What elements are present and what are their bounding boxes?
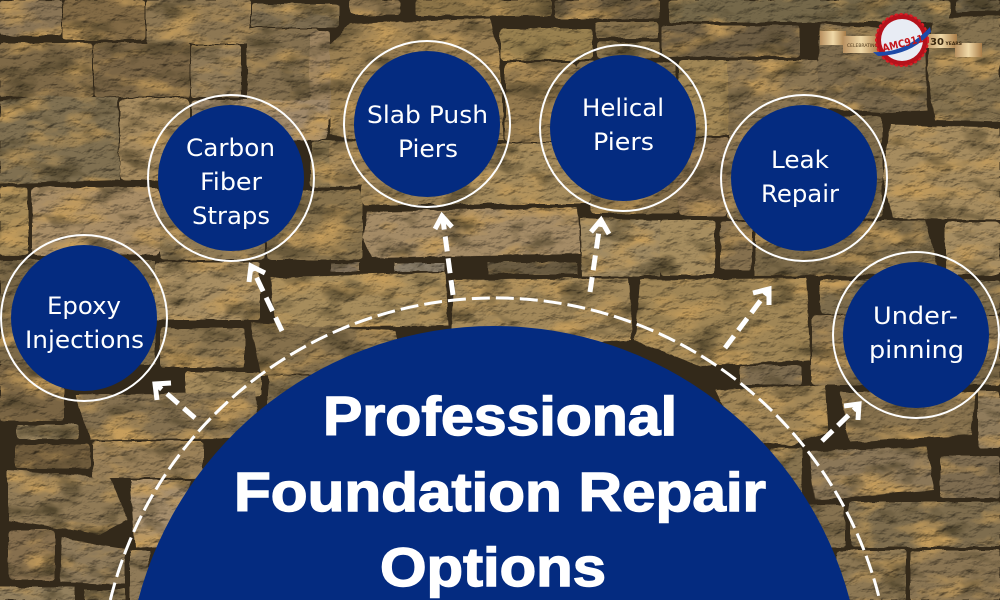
title: Professional [323,385,677,447]
node: Under-pinning: pinning [869,336,964,364]
node: Helical Piers: Piers [593,128,654,156]
dashed arc around main heading [110,298,880,600]
node: Slab Push Piers [344,41,510,207]
node: Epoxy Injections: Epoxy [47,292,121,320]
arrow to Slab Push Piers [435,216,453,295]
node: Slab Push Piers: Slab Push [367,101,488,129]
logo: AMC911 30 years badge [820,14,982,66]
node: Epoxy Injections: Injections [25,326,144,354]
right ribbon: 30 YEARS [930,37,962,48]
node: Under-pinning [833,252,999,418]
title [234,385,766,598]
node: Carbon Fiber Straps [148,95,314,261]
arrow to Epoxy Injections [155,383,195,418]
left ribbon: CELEBRATING [847,43,879,49]
node: Leak Repair: Leak [771,146,829,174]
logo disc: AMC911 [881,33,925,55]
arrow to Helical Piers [590,220,609,292]
node: Carbon Fiber Straps: Fiber [200,168,262,196]
node: Carbon Fiber Straps: Carbon [186,134,275,162]
title: Options [380,536,606,598]
node: Carbon Fiber Straps: Straps [192,202,270,230]
node: Slab Push Piers: Piers [398,135,458,163]
arrow to Carbon Fiber Straps [249,266,282,331]
rosette [876,14,928,66]
left ribbon [820,31,879,53]
title: Foundation Repair [234,461,766,523]
node: Helical Piers [540,45,706,211]
arrow to Under-pinning [822,404,859,441]
node: Epoxy Injections [1,235,167,401]
node: Under-pinning: Under- [873,302,958,330]
right ribbon [925,34,982,57]
arrow to Leak Repair [725,289,769,348]
node: Leak Repair [721,95,887,261]
node: Helical Piers: Helical [582,94,664,122]
logo disc [873,19,931,61]
node: Leak Repair: Repair [761,180,839,208]
main semicircle panel [138,326,850,600]
